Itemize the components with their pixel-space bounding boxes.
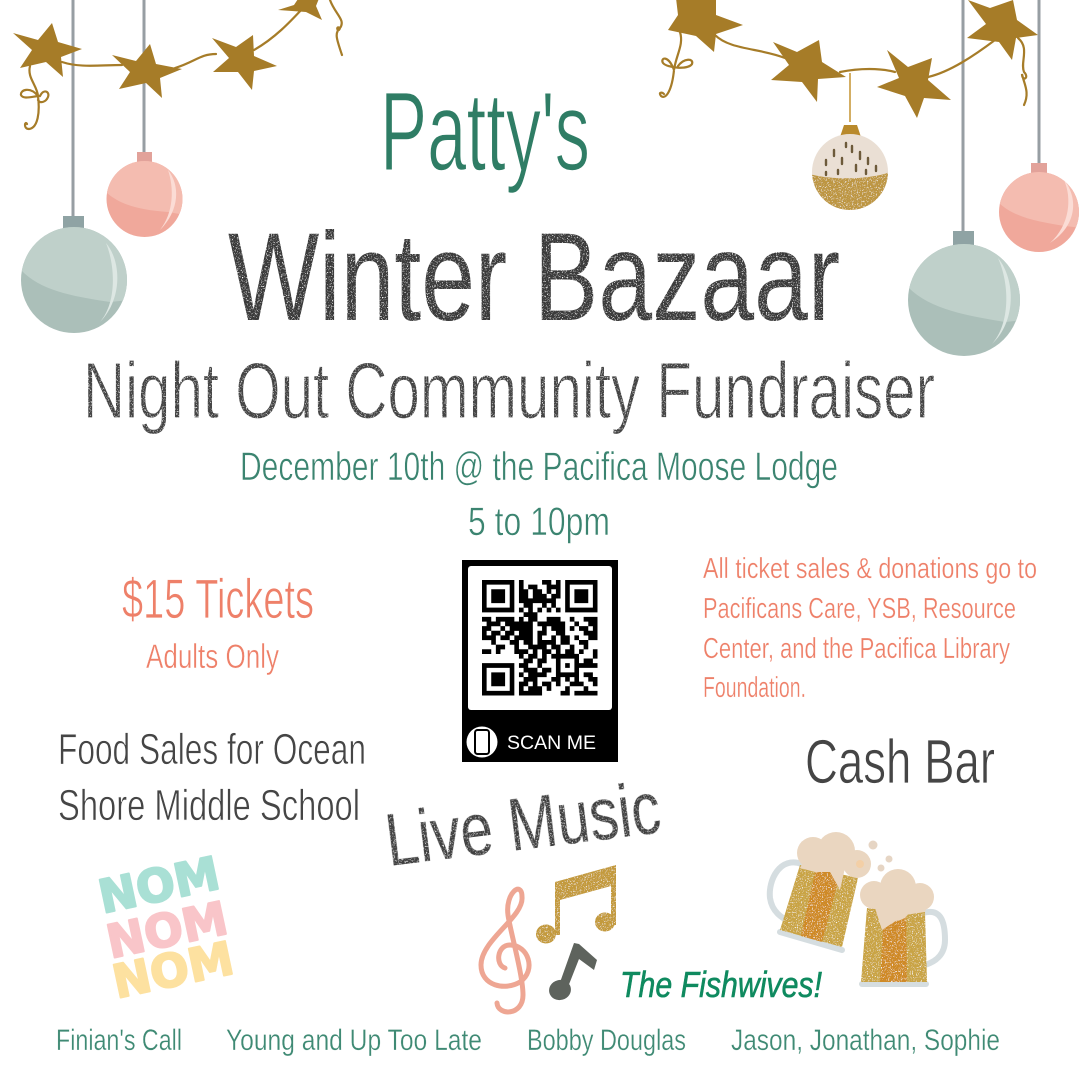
- event time: 5 to 10pm: [468, 500, 610, 544]
- food sales note: [58, 725, 366, 830]
- heading: Patty's: Patty's: [380, 69, 590, 194]
- QR code modules: [482, 582, 598, 693]
- ticket price: $15 Tickets: [122, 567, 314, 630]
- icon: clinking beer mugs: [770, 832, 945, 984]
- food sales note: Shore Middle School: [58, 781, 360, 830]
- event date and venue: December 10th @ the Pacifica Moose Lodge: [240, 445, 838, 489]
- left star garland: [13, 0, 342, 129]
- icon: dark music note: [547, 943, 597, 1003]
- NOM NOM NOM graphic: [94, 846, 238, 1009]
- performer lineup: [56, 1024, 1000, 1057]
- food sales note: Food Sales for Ocean: [58, 725, 366, 774]
- right star garland: [660, 0, 1038, 118]
- NOM NOM NOM graphic: NOM: [108, 931, 238, 1009]
- QR code panel: [462, 560, 618, 762]
- gold glitter ornament: [810, 73, 890, 215]
- band name: The Fishwives: The Fishwives!: [620, 964, 822, 1005]
- beneficiaries note: Foundation.: [703, 672, 806, 704]
- cash bar heading: Cash Bar: [805, 728, 995, 797]
- performer lineup: Bobby Douglas: [527, 1024, 686, 1057]
- adults only note: Adults Only: [146, 638, 279, 676]
- icon: phone: [466, 726, 498, 758]
- scan me label: SCAN ME: [507, 733, 596, 754]
- left hanging ornaments: [21, 0, 185, 333]
- beneficiaries note: [703, 553, 1037, 704]
- performer lineup: Finian's Call: [56, 1024, 182, 1057]
- ornament: large sage bauble right: [908, 231, 1025, 356]
- title: Winter Bazaar: Winter Bazaar: [228, 208, 840, 347]
- left mug: [770, 832, 892, 950]
- performer lineup: Jason, Jonathan, Sophie: [731, 1024, 1000, 1057]
- ornament: large sage bauble left: [21, 216, 130, 333]
- right mug: [860, 869, 945, 984]
- performer lineup: Young and Up Too Late: [226, 1024, 482, 1057]
- ornament: pink bauble left: [106, 152, 185, 237]
- icon: beamed gold notes: [536, 865, 616, 944]
- live music heading: Live Music: [381, 766, 665, 882]
- right hanging ornaments: [908, 0, 1080, 356]
- icon: treble clef: [481, 889, 529, 1012]
- ornament: pink bauble right: [999, 163, 1080, 252]
- NOM NOM NOM graphic: NOM: [102, 891, 232, 969]
- NOM NOM NOM graphic: NOM: [94, 846, 224, 924]
